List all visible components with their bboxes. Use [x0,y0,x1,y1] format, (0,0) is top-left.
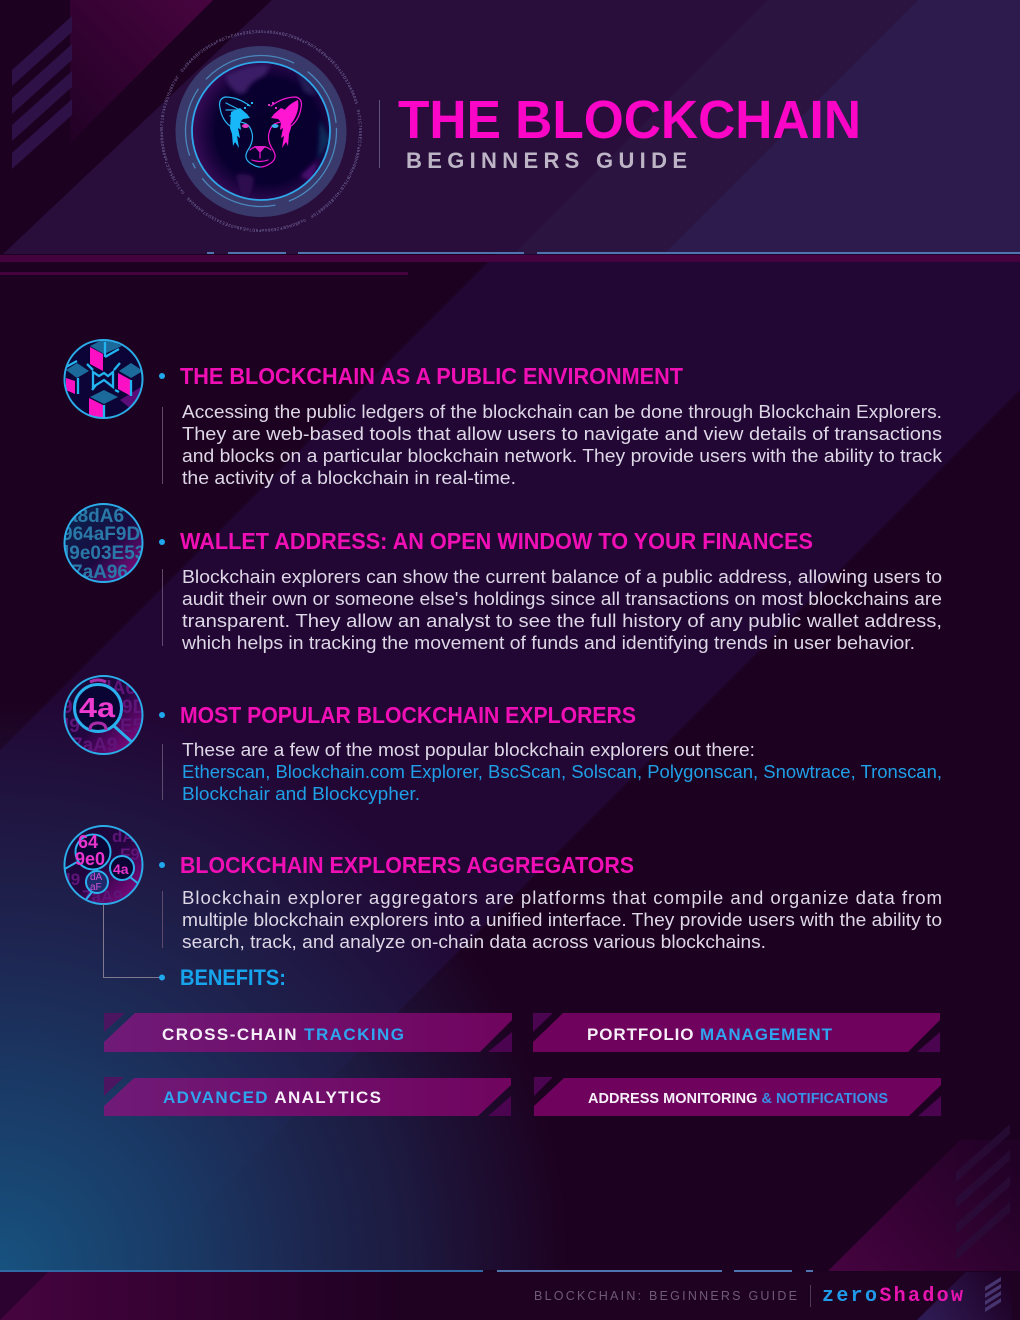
cheetah head [220,97,301,167]
bullet [159,539,165,545]
benefit: cross-chain tracking [104,1013,512,1052]
body text [182,401,943,488]
icon: multiple magnifiers [66,827,142,903]
bullet [159,712,165,718]
body text: the activity of a blockchain in real-time. [182,467,516,488]
icon: magnifier [66,678,142,753]
body text: which helps in tracking the movement of funds and identifying trends in user behavior. [181,632,915,653]
icon: multiple magnifiers: 7aA9 [82,887,123,906]
icon: magnifier: l9 [64,716,80,737]
body text: Etherscan, Blockchain.com Explorer, BscScan, Solscan, Polygonscan, Snowtrace, Tronscan, [182,761,942,782]
connector to benefits [104,904,160,978]
body text: Blockchain explorer aggregators are platforms that compile and organize data from [182,887,942,908]
body text: These are a few of the most popular blockchain explorers out there: [182,739,755,760]
heading: THE BLOCKCHAIN AS A PUBLIC ENVIRONMENT [180,363,683,389]
icon: magnifier: E5 [120,716,144,737]
header band [0,0,1020,254]
icon: multiple magnifiers: 4a [113,861,129,877]
icon: magnifier: dA6 [100,678,136,699]
body text: audit their own or someone else's holdings since all transactions on most blockchains are [182,588,942,609]
icon: magnifier: 7aA9 [72,735,117,756]
body text: and blocks on a particular blockchain network. They provide users with the ability to track [182,445,943,466]
benefit: address monitoring: ADDRESS MONITORING & NOTIFICATIONS [588,1091,888,1107]
icon: address text: 7aA96 [72,562,128,583]
body text: Accessing the public ledgers of the blockchain can be done through Blockchain Explorers. [182,401,942,422]
body text [182,887,942,952]
icon: multiple magnifiers: F9 [120,845,140,864]
body text: Blockchair and Blockcypher. [182,783,420,804]
brand: zeroShadow [822,1285,963,1308]
icon: multiple magnifiers: aF [90,882,102,893]
heading: BLOCKCHAIN EXPLORERS AGGREGATORS [180,852,634,878]
body text: Blockchain explorers can show the current balance of a public address, allowing users to [182,566,942,587]
icon: blockchain cubes [66,341,142,417]
benefit: portfolio management: PORTFOLIO MANAGEMENT [587,1025,833,1044]
title [398,90,861,173]
footer rule [0,1270,813,1272]
icon: magnifier: 4a [79,692,115,723]
icon: multiple magnifiers: dA [90,872,103,883]
heading: MOST POPULAR BLOCKCHAIN EXPLORERS [180,702,636,728]
icon: multiple magnifiers: 64 [78,832,98,852]
icon: address text: l9e03E53 [64,543,145,564]
icon: address text: 964aF9D [62,524,140,545]
body text: transparent. They allow an analyst to see the full history of any public wallet address, [182,610,942,631]
section 2: wallet address [62,503,942,653]
bullet [159,373,165,379]
body text [181,566,942,653]
icon: multiple magnifiers: l9 [66,870,80,889]
footer [534,1277,1001,1312]
icon: address text [66,505,142,581]
icon: magnifier: 9 [62,697,73,718]
footer: BLOCKCHAIN: BEGINNERS GUIDE [534,1289,797,1303]
bullet [159,862,165,868]
section 3: popular explorers [62,676,942,804]
icon: multiple magnifiers: dA6 [112,827,144,846]
icon: hatch mark [985,1277,1001,1312]
body text: search, track, and analyze on-chain data across various blockchains. [182,931,766,952]
body text [182,739,942,804]
decorative hatch top-left [12,16,72,169]
decorative hatch bottom-right [956,1124,1010,1260]
body text: multiple blockchain explorers into a unified interface. They provide users with the ability to [182,909,942,930]
benefit: advanced analytics: ADVANCED ANALYTICS [163,1088,381,1107]
benefits heading: BENEFITS: [180,965,286,990]
benefit: portfolio management [533,1013,940,1052]
title: THE BLOCKCHAIN [398,90,861,150]
section 4: aggregators [63,826,942,978]
title: BEGINNERS GUIDE [406,148,687,173]
heading: WALLET ADDRESS: AN OPEN WINDOW TO YOUR FINANCES [180,528,813,554]
icon: magnifier: 9D [122,697,146,718]
benefit: address monitoring [534,1077,941,1116]
logo: cheetah in globe: 0xd8dA6BF26964aF9D7eEd9e03E53415D37aA96045 0x71C7656EC7ab88b098defB751B7401B5f6d8976F 0xd8dA6BF26964aF9D7eEd9e03E53415D37aA96045 0x71C7656EC7ab88b098defB751B7401B5f6d8976F 0xd8dA6BF26964aF9D7eEd9e03E53415D37aA96045 [160,30,362,232]
benefit: advanced analytics [104,1077,511,1116]
body text: They are web-based tools that allow users to navigate and view details of transactions [182,423,942,444]
header rule lines [0,252,1020,275]
icon: multiple magnifiers: 9e0 [75,849,105,869]
icon: address text: a8dA6 [67,506,124,527]
header divider [379,100,380,168]
logo: cheetah in globe [160,30,362,232]
benefit: cross-chain tracking: CROSS-CHAIN TRACKING [162,1025,404,1044]
section 1: public environment [62,338,943,488]
